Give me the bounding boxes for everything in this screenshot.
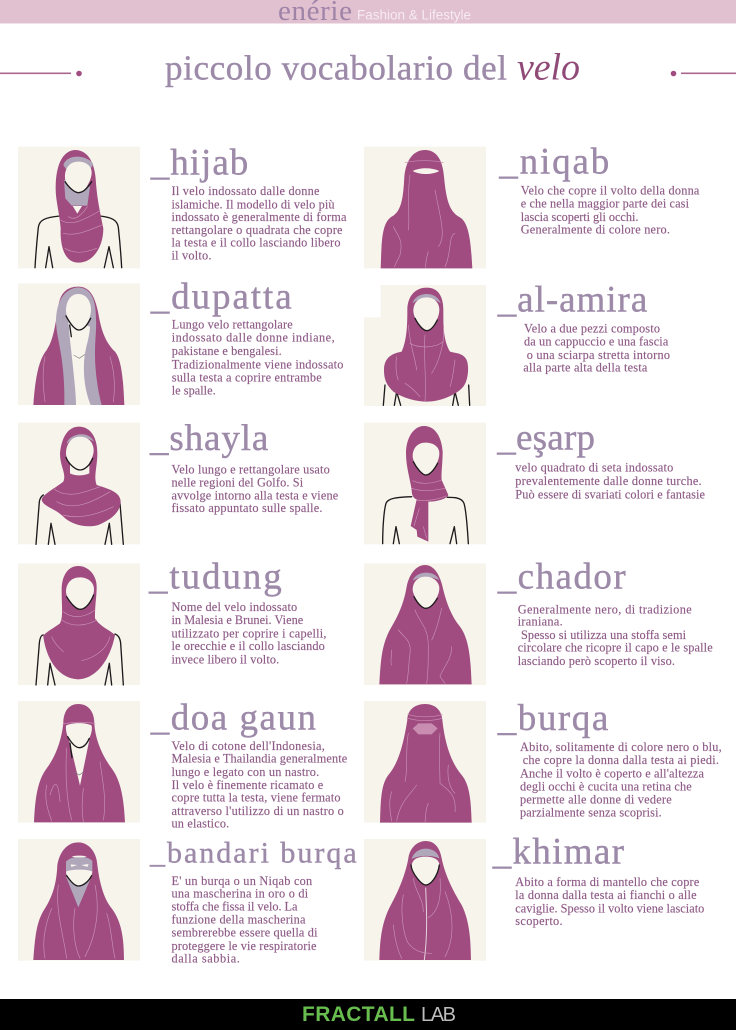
top brand bar	[0, 0, 736, 27]
heading: doa gaun: _doa gaun	[150, 697, 316, 738]
text: niqab description: e che nella maggior parte dei casi	[521, 197, 690, 211]
text: shayla description: nelle regioni del Golfo. Si	[172, 476, 304, 490]
heading: dupatta: _dupatta	[150, 276, 292, 317]
text: dupatta description: Tradizionalmente viene indossato	[172, 357, 343, 371]
text: burqa description: che copre la donna dalla testa ai piedi.	[523, 753, 719, 767]
text: hijab description: islamiche. Il modello di velo più	[172, 197, 334, 211]
text: dupatta description: le spalle.	[172, 383, 216, 397]
text: burqa description: parzialmente senza scoprisi.	[520, 806, 662, 820]
text: bandari burqa description: dalla sabbia.	[172, 952, 240, 966]
text: niqab description: Velo che copre il volto della donna	[521, 183, 700, 197]
text: doa gaun description: Malesia e Thailandia generalmente	[172, 752, 348, 766]
text: doa gaun description	[172, 739, 348, 831]
title: piccolo vocabolario del	[165, 48, 507, 87]
text: chador description: iraniana.	[518, 615, 563, 629]
heading: shayla: _shayla	[149, 418, 268, 459]
left title ornament	[0, 71, 82, 76]
text: niqab description: lascia scoperti gli occhi.	[521, 210, 638, 224]
text: hijab description: la testa e il collo lasciando libero	[172, 236, 340, 250]
text: tudung description: in Malesia e Brunei. Viene	[172, 613, 304, 627]
text: bandari burqa description: una mascherina in oro o di	[172, 887, 309, 901]
text: chador description: lasciando però scoperto il viso.	[518, 654, 675, 668]
text: al-amira description	[523, 321, 670, 375]
panel: burqa illustration	[364, 701, 486, 823]
heading: hijab: _hijab	[150, 142, 248, 183]
text: shayla description	[172, 462, 339, 515]
heading: tudung: _tudung	[148, 556, 282, 597]
text: shayla description: avvolge intorno alla testa e viene	[172, 488, 339, 502]
heading: burqa: _burqa	[497, 698, 608, 739]
heading: bandari burqa: _bandari burqa	[149, 837, 357, 870]
text: doa gaun description: Velo di cotone dell'Indonesia,	[172, 739, 325, 753]
footer bar with logo: LAB	[421, 1004, 456, 1026]
text: shayla description: Velo lungo e rettangolare usato	[172, 462, 330, 476]
text: bandari burqa description: sembrerebbe essere quella di	[172, 926, 318, 940]
text: doa gaun description: lungo e legato con un nastro.	[172, 765, 319, 779]
footer bar with logo	[0, 999, 736, 1030]
text: niqab description: Generalmente di colore nero.	[521, 223, 670, 237]
heading: chador: _chador	[497, 556, 626, 597]
text: tudung description	[172, 600, 326, 666]
text: burqa description: degli occhi è cucita una retina che	[520, 780, 692, 794]
panel: doa gaun illustration	[18, 701, 140, 823]
text: esarp description	[515, 461, 706, 501]
text: hijab description: indossato è generalmente di forma	[172, 210, 347, 224]
text: al-amira description: Velo a due pezzi composto	[524, 321, 660, 335]
text: doa gaun description: Il velo è finemente ricamato e	[172, 778, 324, 792]
panel: khimar illustration	[364, 839, 486, 961]
text: chador description: circolare che ricopre il capo e le spalle	[518, 641, 713, 655]
right title ornament	[671, 71, 736, 76]
text: doa gaun description: copre tutta la testa, viene fermato	[172, 791, 340, 805]
text: khimar description: Abito a forma di mantello che copre	[515, 875, 700, 889]
text: burqa description	[520, 740, 722, 820]
text: doa gaun description: attraverso l'utilizzo di un nastro o	[172, 804, 344, 818]
text: khimar description: caviglie. Spesso il volto viene lasciato	[515, 901, 704, 915]
text: doa gaun description: un elastico.	[172, 817, 229, 831]
text: tudung description: Nome del velo indossato	[172, 600, 297, 614]
panel: hijab illustration	[18, 147, 140, 268]
footer bar with logo: FRACTALL	[302, 1003, 415, 1026]
text: hijab description: Il velo indossato dalle donne	[172, 184, 320, 198]
text: al-amira description: o una sciarpa stretta intorno	[527, 348, 670, 362]
text: bandari burqa description	[172, 874, 318, 966]
heading: esarp: _eşarp	[496, 417, 595, 458]
text: khimar description: scoperto.	[515, 914, 563, 928]
heading: al-amira: _al-amira	[497, 280, 647, 321]
top brand bar: Fashion & Lifestyle	[357, 7, 471, 22]
text: burqa description: permette alle donne di vedere	[520, 792, 672, 806]
panel: dupatta illustration	[18, 283, 140, 405]
text: dupatta description	[172, 317, 343, 397]
text: tudung description: invece libero il volto.	[172, 652, 279, 666]
panel: esarp illustration	[364, 423, 486, 544]
text: bandari burqa description: funzione della mascherina	[172, 912, 306, 926]
text: chador description: Spesso si utilizza una stoffa semi	[521, 628, 687, 642]
text: hijab description: rettangolare o quadrata che copre	[172, 223, 343, 237]
text: esarp description: velo quadrato di seta indossato	[515, 461, 673, 475]
text: al-amira description: da un cappuccio e una fascia	[524, 335, 669, 349]
text: khimar description: la donna dalla testa ai fianchi o alle	[515, 888, 697, 902]
text: khimar description	[515, 875, 704, 928]
panel: al-amira illustration	[364, 285, 486, 406]
panel: niqab illustration	[364, 147, 486, 268]
text: dupatta description: indossato dalle donne indiane,	[172, 331, 335, 345]
text: al-amira description: alla parte alta della testa	[523, 361, 648, 375]
panel: shayla illustration	[18, 423, 140, 544]
text: chador description	[518, 602, 713, 668]
text: dupatta description: sulla testa a coprire entrambe	[172, 371, 322, 385]
text: niqab description	[521, 183, 700, 237]
text: bandari burqa description: stoffa che fissa il velo. La	[172, 900, 298, 914]
text: bandari burqa description: E' un burqa o un Niqab con	[172, 874, 312, 888]
text: burqa description: Anche il volto è coperto e all'altezza	[520, 766, 705, 780]
title: velo	[517, 46, 580, 88]
text: hijab description: il volto.	[172, 248, 212, 262]
text: burqa description: Abito, solitamente di colore nero o blu,	[520, 740, 722, 754]
text: tudung description: utilizzato per coprire i capelli,	[172, 626, 326, 640]
heading: niqab: _niqab	[498, 141, 609, 182]
panel: chador illustration	[364, 563, 486, 685]
text: bandari burqa description: proteggere le vie respiratorie	[172, 939, 317, 953]
text: hijab description	[172, 184, 347, 262]
text: dupatta description: Lungo velo rettangolare	[172, 317, 293, 331]
panel: tudung illustration	[18, 563, 140, 685]
text: chador description: Generalmente nero, di tradizione	[518, 602, 692, 616]
text: esarp description: prevalentemente dalle donne turche.	[515, 474, 702, 488]
panel: bandari burqa illustration	[18, 839, 140, 961]
text: dupatta description: pakistane e bengalesi.	[172, 344, 282, 358]
text: esarp description: Può essere di svariati colori e fantasie	[515, 487, 706, 501]
heading: khimar: _khimar	[492, 831, 624, 872]
text: shayla description: fissato appuntato sulle spalle.	[172, 501, 322, 515]
text: tudung description: le orecchie e il collo lasciando	[172, 639, 325, 653]
